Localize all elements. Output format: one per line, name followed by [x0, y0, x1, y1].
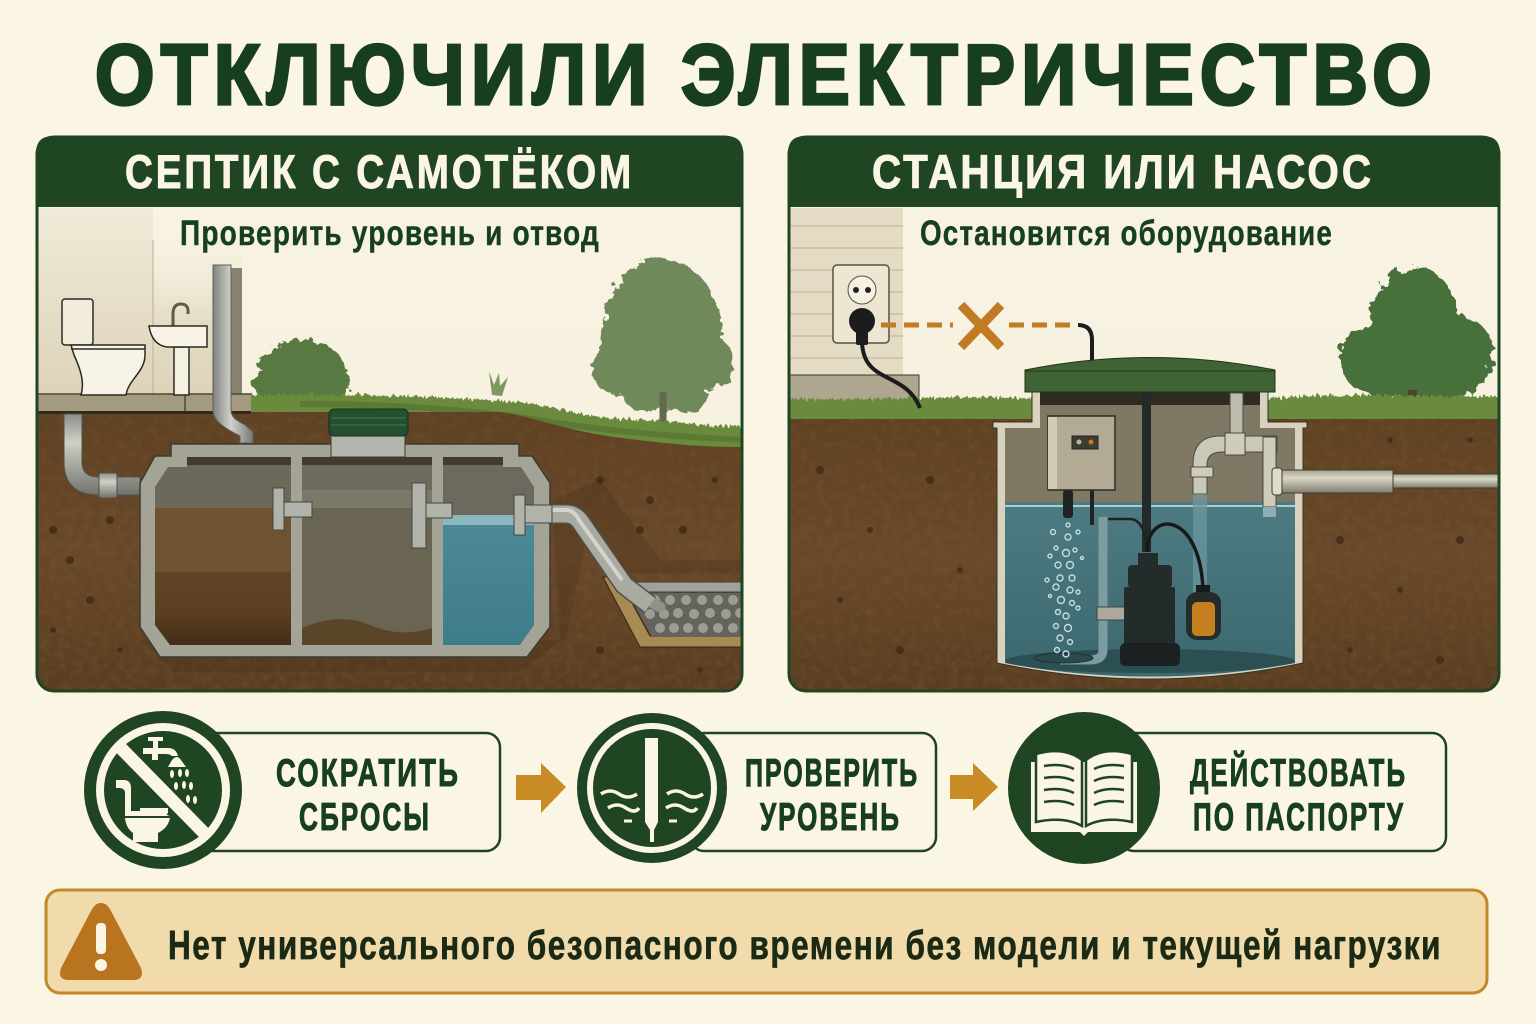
- illustration: outlet pipe: [530, 510, 650, 605]
- step 2 label: ПРОВЕРИТЬ: [745, 752, 919, 795]
- subheading: station: Остановится оборудование: [920, 214, 1333, 253]
- small riser pipe: [1060, 517, 1147, 660]
- icon: toilet: [62, 299, 145, 395]
- illustration: bathroom wall: [38, 208, 243, 398]
- icon: sink: [149, 304, 207, 395]
- discharge pipes: [1191, 393, 1277, 594]
- outflow pipe: [1272, 468, 1499, 495]
- illustration: floor slab: [38, 394, 251, 414]
- panel frame right: [788, 136, 1500, 691]
- illustration: bush right: [1340, 268, 1493, 408]
- panel frame left: [36, 136, 743, 691]
- heading: station: СТАНЦИЯ ИЛИ НАСОС: [872, 145, 1374, 198]
- illustration: gravel drain field: [603, 577, 745, 647]
- illustration: septic tank: [140, 409, 552, 657]
- icon: power outlet with plug: [833, 265, 920, 408]
- lid: [1025, 358, 1275, 392]
- step 1 label: [276, 752, 460, 839]
- discharge disc: [1035, 653, 1093, 663]
- step 3 label: ДЕЙСТВОВАТЬ: [1190, 750, 1407, 795]
- panel: septic with gravity flow: [38, 208, 743, 692]
- illustration: ground: [38, 396, 743, 692]
- panel: station or pump: [788, 208, 1500, 692]
- icon: warning triangle: [60, 903, 142, 980]
- rod: [1142, 392, 1151, 552]
- bubbles: [1045, 523, 1084, 657]
- step 1 card: [200, 733, 500, 851]
- step 2 label: УРОВЕНЬ: [760, 796, 901, 839]
- chamber 3 water: [443, 457, 534, 645]
- step 2 card: [690, 733, 936, 851]
- step 1 label: СОКРАТИТЬ: [276, 752, 460, 795]
- icon: level probe: [577, 713, 727, 863]
- water: [1005, 502, 1295, 692]
- illustration: house wall: [790, 208, 919, 408]
- subheading: septic: Проверить уровень и отвод: [180, 214, 600, 253]
- arrow 2: [950, 763, 998, 811]
- illustration: pump tank: [993, 358, 1499, 692]
- step 3 label: [1190, 750, 1407, 839]
- hatch: [329, 409, 408, 457]
- step 3 card: [1120, 733, 1446, 851]
- illustration: tree: [591, 259, 733, 430]
- step 3 label: ПО ПАСПОРТУ: [1193, 796, 1405, 839]
- chamber 2: [302, 457, 432, 645]
- icon: no water discharge: [84, 711, 242, 869]
- chamber 1 sludge: [155, 457, 291, 645]
- step 2 label: [745, 752, 919, 839]
- illustration: ground right: [788, 397, 1500, 692]
- icon: cut cable: [881, 305, 1092, 360]
- float switch: [1186, 585, 1221, 640]
- step 1 label: СБРОСЫ: [299, 796, 431, 839]
- control box: [1048, 416, 1115, 525]
- transfer tees: [273, 483, 552, 548]
- heading: septic: СЕПТИК С САМОТЁКОМ: [125, 145, 634, 198]
- warning banner: [46, 890, 1487, 993]
- illustration: vent pipe: [213, 265, 253, 443]
- icon: open book: [1008, 712, 1160, 864]
- illustration: bush: [254, 340, 508, 404]
- illustration: inlet pipe: [64, 414, 140, 498]
- pump: [1120, 524, 1203, 666]
- arrow 1: [516, 763, 566, 813]
